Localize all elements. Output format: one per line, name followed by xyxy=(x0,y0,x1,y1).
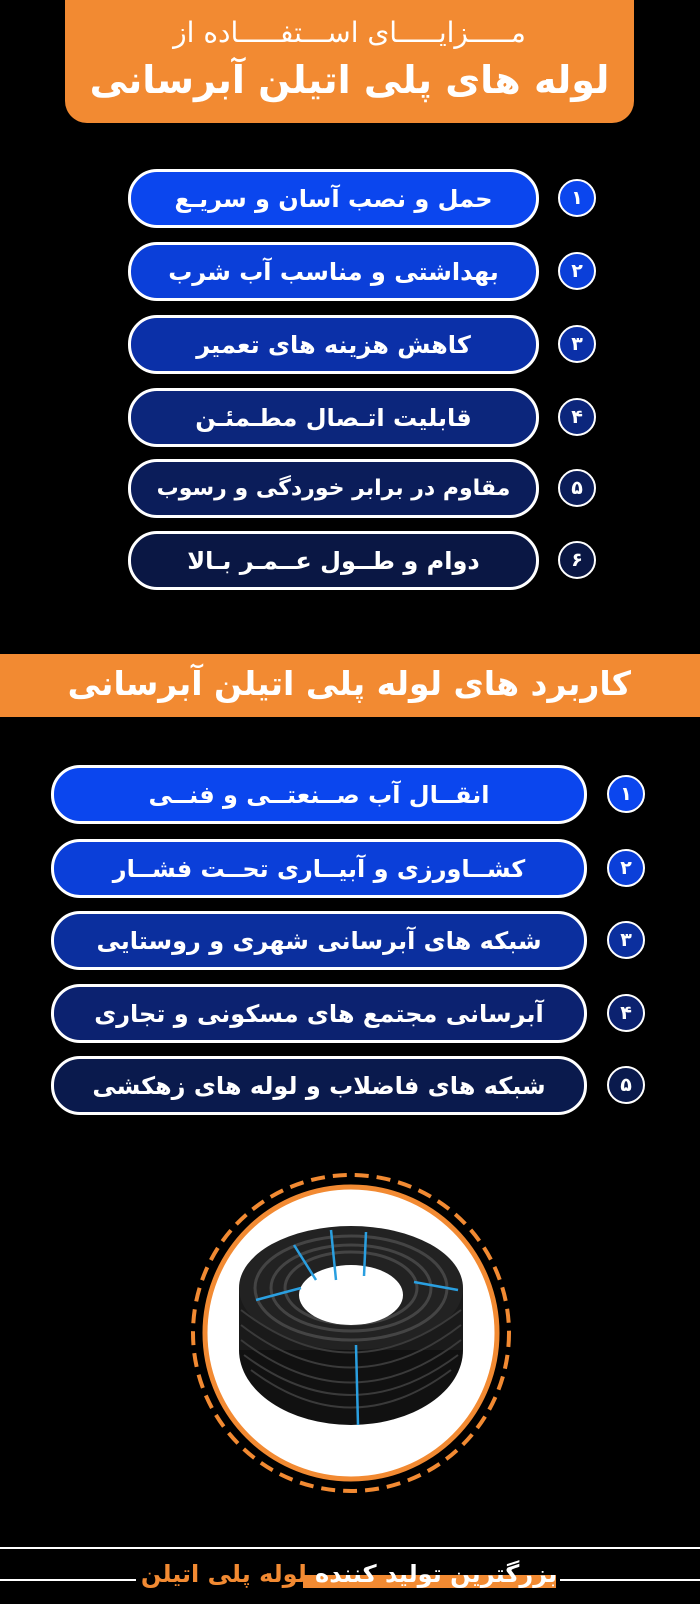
list: advantages xyxy=(128,169,596,590)
app 2: ۲ xyxy=(620,857,632,879)
section heading band xyxy=(0,654,700,717)
item 2: ۲ xyxy=(571,260,583,282)
product image: pipe coil xyxy=(191,1173,511,1493)
app 1 xyxy=(51,765,645,824)
item 2 xyxy=(128,242,596,301)
app 2: کشــاورزی و آبیــاری تحــت فشــار xyxy=(113,854,525,882)
item 1 xyxy=(128,169,596,228)
item 4 xyxy=(128,388,596,447)
app 1: انقــال آب صــنعتــی و فنــی xyxy=(148,780,490,808)
app 3: ۳ xyxy=(620,929,632,951)
item 3: کاهش هزینه های تعمیر xyxy=(196,330,471,358)
item 6 xyxy=(128,531,596,590)
footer tagline xyxy=(0,1560,700,1588)
app 5: ۵ xyxy=(620,1074,632,1096)
item 1: حمل و نصب آسان و سریـع xyxy=(175,184,492,212)
item 5: ۵ xyxy=(571,477,583,499)
header title: لوله های پلی اتیلن آبرسانی xyxy=(90,58,609,102)
item 6: ۶ xyxy=(571,549,583,571)
header subtitle: مـــــزایـــــای اســـتفـــــاده از xyxy=(173,16,526,49)
footer tagline: بزرگترین تولید کننده لوله پلی اتیلن xyxy=(141,1560,557,1588)
item 5: مقاوم در برابر خوردگی و رسوب xyxy=(157,476,510,501)
footer divider xyxy=(0,1547,700,1549)
app 4: ۴ xyxy=(620,1002,632,1024)
item 3 xyxy=(128,315,596,374)
item 4: قابلیت اتـصال مطـمئـن xyxy=(195,404,472,432)
item 2: بهداشتی و مناسب آب شرب xyxy=(168,258,499,286)
item 6: دوام و طــول عــمـر بـالا xyxy=(187,546,480,574)
item 3: ۳ xyxy=(571,333,583,355)
section heading band: کاربرد های لوله پلی اتیلن آبرسانی xyxy=(68,664,631,703)
app 1: ۱ xyxy=(620,783,632,805)
item 4: ۴ xyxy=(571,406,583,428)
app 2 xyxy=(51,839,645,898)
app 5 xyxy=(51,1056,645,1115)
header panel xyxy=(65,0,634,123)
app 4: آبرسانی مجتمع های مسکونی و تجاری xyxy=(94,1000,544,1028)
list: applications xyxy=(51,765,645,1115)
item 5 xyxy=(128,459,596,518)
item 1: ۱ xyxy=(571,187,583,209)
app 4 xyxy=(51,984,645,1043)
app 3: شبکه های آبرسانی شهری و روستایی xyxy=(96,926,542,954)
app 3 xyxy=(51,911,645,970)
app 5: شبکه های فاضلاب و لوله های زهکشی xyxy=(92,1072,546,1100)
